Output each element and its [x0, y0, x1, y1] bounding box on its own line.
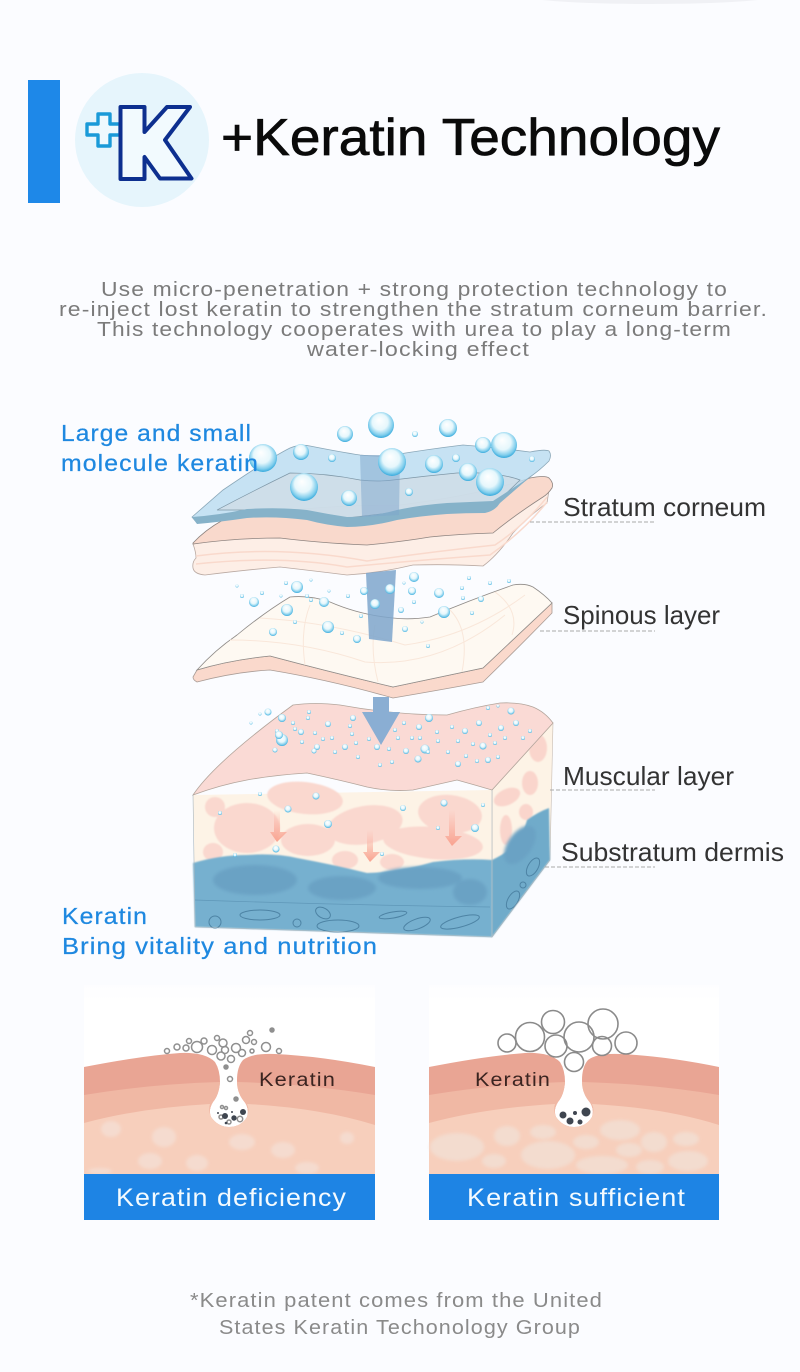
spinous layer sheet: [193, 584, 552, 698]
skin layers diagram: [192, 412, 553, 937]
penetration arrow: [360, 455, 400, 642]
intro paragraph: [59, 279, 768, 361]
label: spinous layer: Spinous layer: [563, 600, 720, 630]
label: keratin: Keratin: [475, 1070, 551, 1091]
panel: keratin sufficient: [429, 985, 719, 1220]
keratin molecules: [218, 412, 535, 857]
banner: keratin sufficient: [429, 1174, 719, 1220]
intro paragraph: water-locking effect: [306, 339, 530, 361]
label: large and small molecule keratin: [61, 420, 259, 476]
intro paragraph: Use micro-penetration + strong protection technology to: [101, 279, 728, 301]
label: large and small molecule keratin: molecule keratin: [61, 450, 259, 476]
banner: keratin sufficient: Keratin sufficient: [467, 1184, 686, 1212]
label: keratin bring vitality and nutrition: Keratin: [62, 903, 148, 929]
keratin sheet: [192, 445, 550, 527]
skin cross-section: [84, 1053, 375, 1174]
label: keratin bring vitality and nutrition: [62, 903, 378, 959]
intro paragraph: re-inject lost keratin to strengthen the stratum corneum barrier.: [59, 299, 768, 321]
label: substratum dermis: Substratum dermis: [561, 837, 784, 867]
label: large and small molecule keratin: Large and small: [61, 420, 252, 446]
label: keratin: Keratin: [259, 1070, 336, 1091]
label: keratin bring vitality and nutrition: Bring vitality and nutrition: [62, 933, 378, 959]
label: muscular layer: Muscular layer: [563, 761, 734, 791]
skin cross-section: [429, 1053, 719, 1174]
lower penetration arrow: [362, 697, 400, 745]
keratin particles sparse: [164, 1028, 282, 1124]
stratum corneum layer: [193, 476, 553, 575]
title: +Keratin Technology: [221, 109, 720, 167]
icon: plus K logo: [75, 73, 209, 207]
label: stratum corneum: Stratum corneum: [563, 492, 766, 522]
footnote: [190, 1290, 603, 1339]
banner: keratin deficiency: [84, 1174, 375, 1220]
panel: keratin deficiency: [84, 985, 375, 1220]
footnote: States Keratin Techonology Group: [219, 1317, 581, 1339]
header accent bar: [28, 80, 60, 203]
banner: keratin deficiency: Keratin deficiency: [116, 1184, 347, 1212]
nutrition arrows: [270, 810, 462, 862]
muscular block: [193, 703, 553, 937]
keratin particles full: [498, 1009, 637, 1124]
footnote: *Keratin patent comes from the United: [190, 1290, 603, 1312]
intro paragraph: This technology cooperates with urea to play a long-term: [97, 319, 732, 341]
